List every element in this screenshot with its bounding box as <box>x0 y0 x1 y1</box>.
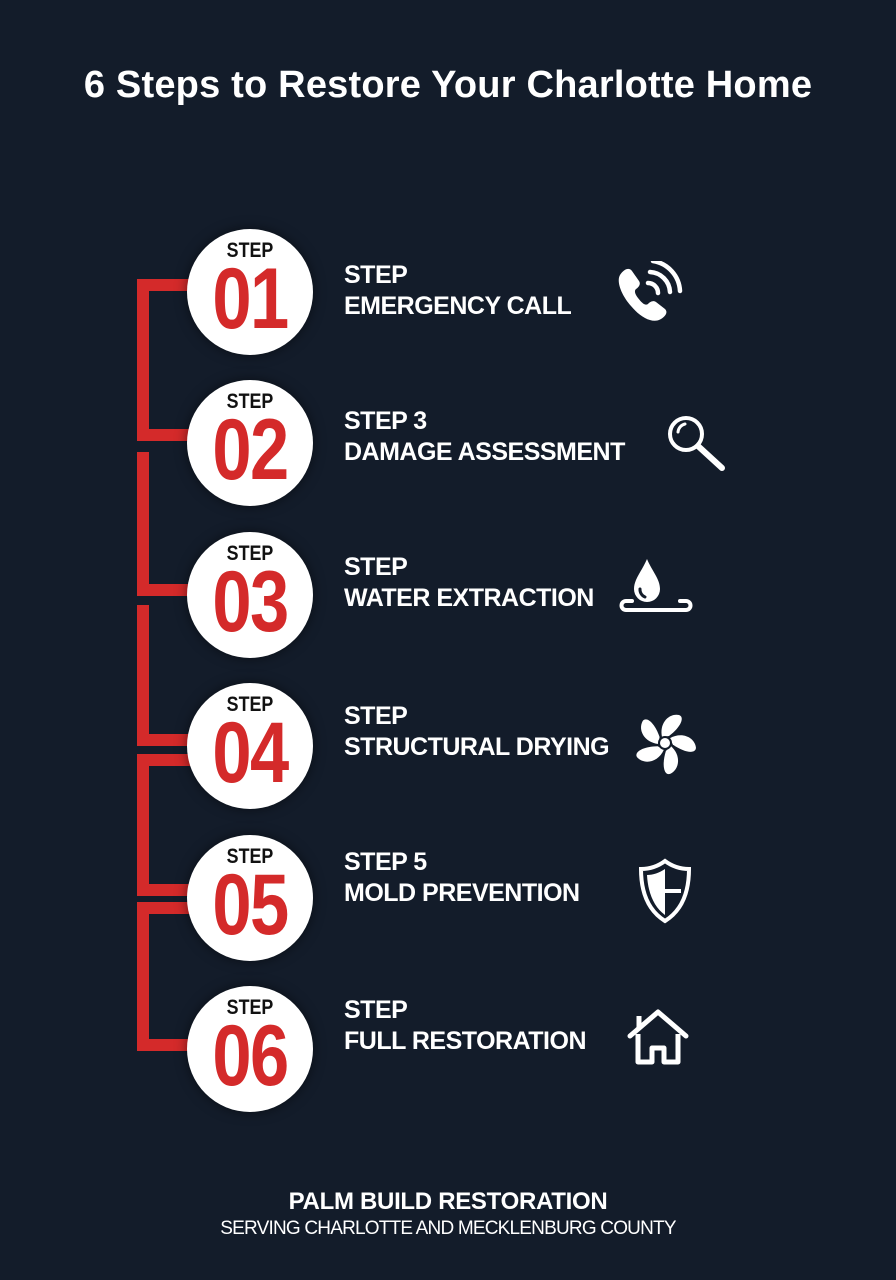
step 4 <box>179 682 696 810</box>
label 2: DAMAGE ASSESSMENT <box>344 438 625 466</box>
label 2: STEP 3 <box>344 407 427 435</box>
badge 03: STEP <box>227 542 273 565</box>
icon: house <box>628 1009 688 1064</box>
step 1 <box>179 228 682 356</box>
badge 03 <box>187 532 313 658</box>
badge 02 <box>187 380 313 506</box>
label 1: STEP <box>344 261 407 289</box>
icon: phone <box>618 261 682 321</box>
label 3: STEP <box>344 553 407 581</box>
badge 04: STEP <box>227 693 273 716</box>
badge 06 <box>187 986 313 1112</box>
label 2 <box>344 407 626 466</box>
label 3 <box>344 553 594 612</box>
badge 02: STEP <box>227 390 273 413</box>
badge 04 <box>187 683 313 809</box>
label 4: STEP <box>344 702 407 730</box>
badge 05 <box>187 835 313 961</box>
badge 01: STEP <box>227 239 273 262</box>
step 3 <box>179 530 692 660</box>
footer <box>220 1188 676 1239</box>
badge 02: 02 <box>212 402 288 498</box>
badge 01 <box>187 229 313 355</box>
badge 06: STEP <box>227 996 273 1019</box>
step 6 <box>179 984 688 1114</box>
badge 05: STEP <box>227 845 273 868</box>
badge 05: 05 <box>212 857 288 953</box>
label 5 <box>344 848 580 907</box>
service area: SERVING CHARLOTTE AND MECKLENBURG COUNTY <box>220 1218 676 1239</box>
label 4: STRUCTURAL DRYING <box>344 733 609 761</box>
badge 01: 01 <box>212 251 288 347</box>
icon: shield <box>639 858 691 924</box>
label 1: EMERGENCY CALL <box>344 292 571 320</box>
title: 6 Steps to Restore Your Charlotte Home <box>84 64 812 106</box>
label 5: STEP 5 <box>344 848 427 876</box>
label 5: MOLD PREVENTION <box>344 879 580 907</box>
icon: water drop <box>620 559 692 612</box>
step 5 <box>179 834 691 962</box>
label 6: FULL RESTORATION <box>344 1027 586 1055</box>
badge 04: 04 <box>212 705 288 801</box>
label 6 <box>344 996 586 1055</box>
label 1 <box>344 261 571 320</box>
label 6: STEP <box>344 996 407 1024</box>
step 2 <box>179 378 725 508</box>
company name: PALM BUILD RESTORATION <box>289 1188 607 1215</box>
icon: fan <box>636 714 696 774</box>
badge 06: 06 <box>212 1008 288 1104</box>
label 3: WATER EXTRACTION <box>344 584 594 612</box>
icon: magnifier <box>668 416 725 471</box>
label 4 <box>344 702 609 761</box>
badge 03: 03 <box>212 554 288 650</box>
